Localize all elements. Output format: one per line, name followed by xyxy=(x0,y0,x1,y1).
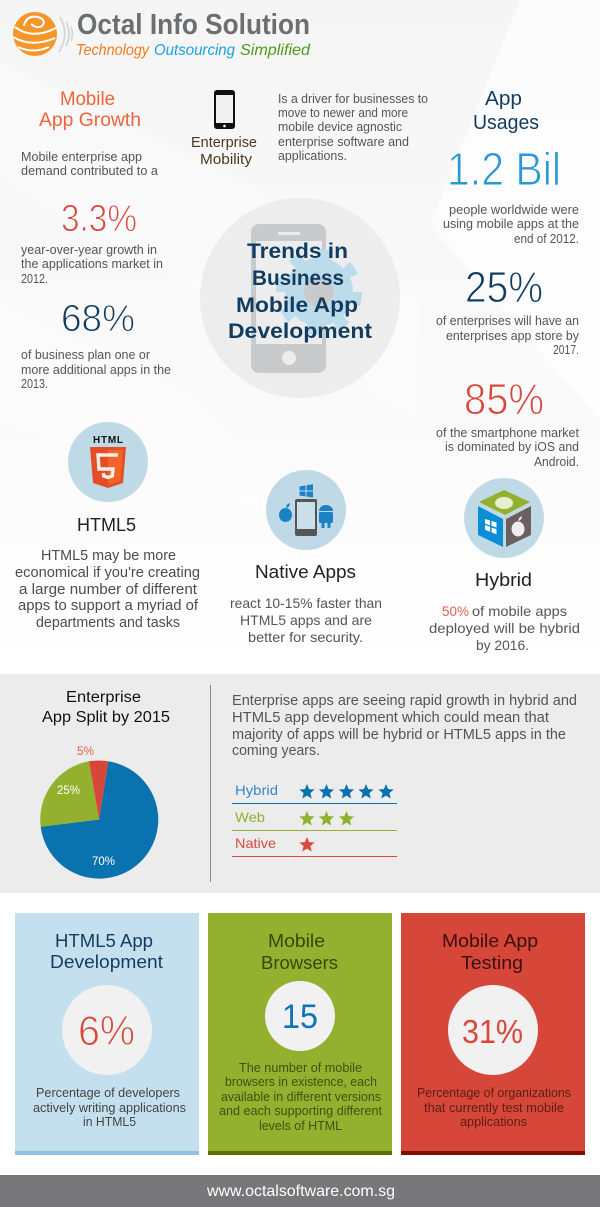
description: applications xyxy=(460,1114,527,1129)
description xyxy=(278,91,428,163)
growth text: the applications market in xyxy=(21,256,163,271)
heading: Browsers xyxy=(261,953,338,973)
panel: central title badge xyxy=(200,198,400,398)
heading: html5: HTML5 xyxy=(77,515,136,535)
intro text: Mobile enterprise app xyxy=(21,149,142,164)
description xyxy=(417,1085,571,1129)
title: Trends in xyxy=(247,240,348,263)
description: 50% xyxy=(442,603,469,619)
icon: phone and gear xyxy=(251,224,358,373)
description: The number of mobile xyxy=(239,1060,362,1075)
tagline xyxy=(76,42,311,59)
stat: 25%: 25% xyxy=(465,263,543,312)
description: mobile device agnostic xyxy=(278,119,402,134)
panel: mobile app growth xyxy=(21,89,171,391)
smartphone market text: Android. xyxy=(534,454,579,469)
description: departments and tasks xyxy=(36,614,180,631)
heading: Mobile xyxy=(268,931,325,951)
heading: enterprise mobility: Enterprise xyxy=(191,134,257,151)
legend: hybrid rating xyxy=(232,782,397,804)
legend: web rating xyxy=(232,809,397,831)
description: in HTML5 xyxy=(83,1114,136,1129)
intro text xyxy=(21,149,159,178)
description: Percentage of developers xyxy=(36,1085,180,1100)
heading: enterprise app split xyxy=(42,689,170,726)
people text: end of 2012. xyxy=(514,231,579,246)
footer: www.octalsoftware.com.sg xyxy=(206,1183,395,1200)
panel: mobile browsers card xyxy=(208,913,392,1155)
heading xyxy=(261,931,338,973)
icon: hybrid cube xyxy=(464,478,544,558)
people text xyxy=(443,202,579,246)
description xyxy=(15,547,200,631)
people text: people worldwide were xyxy=(449,202,579,217)
heading xyxy=(50,931,163,972)
panel: app usages xyxy=(436,88,579,469)
description: apps to support a myriad of xyxy=(18,597,199,614)
description: available in different versions xyxy=(221,1089,381,1104)
panel: hybrid xyxy=(429,478,580,653)
heading: Mobile App xyxy=(442,931,538,951)
heading: enterprise app split: App Split by 2015 xyxy=(42,709,170,726)
heading: native apps: Native Apps xyxy=(255,562,356,582)
tagline: Technology xyxy=(76,42,150,59)
legend: hybrid rating: Hybrid xyxy=(235,782,278,798)
description xyxy=(429,603,580,653)
panel: html5 xyxy=(15,422,200,631)
description: applications. xyxy=(278,148,347,163)
icon: html5 badge xyxy=(68,422,148,502)
panel: enterprise mobility xyxy=(191,90,428,168)
business plan text: of business plan one or xyxy=(21,347,151,362)
description: coming years. xyxy=(232,743,320,759)
description: better for security. xyxy=(248,629,363,645)
smartphone market text xyxy=(436,425,579,469)
description: economical if you're creating xyxy=(15,564,200,581)
heading xyxy=(442,931,538,973)
stat circle: 31% xyxy=(448,985,538,1075)
heading: Development xyxy=(50,952,163,972)
description: Is a driver for businesses to xyxy=(278,91,428,106)
description: react 10-15% faster than xyxy=(230,595,382,611)
growth text: year-over-year growth in xyxy=(21,242,157,257)
title xyxy=(228,240,372,343)
description: deployed will be hybrid xyxy=(429,620,580,636)
description: levels of HTML xyxy=(259,1118,342,1133)
stat: 68%: 68% xyxy=(61,298,135,340)
tagline: Outsourcing xyxy=(154,42,235,59)
logo xyxy=(13,9,311,59)
heading: hybrid: Hybrid xyxy=(475,570,532,590)
tagline: Simplified xyxy=(240,42,311,59)
badge circle xyxy=(200,198,400,398)
pie chart: 5% xyxy=(77,744,94,758)
enterprise store text: 2017. xyxy=(553,342,579,357)
panel: native apps xyxy=(230,470,382,645)
footer xyxy=(0,1175,600,1207)
title: Mobile App xyxy=(236,294,358,317)
legend: native rating: Native xyxy=(235,835,276,851)
legend: native rating xyxy=(232,835,397,857)
description: that currently test mobile xyxy=(424,1100,564,1115)
icon: native platforms xyxy=(266,470,346,550)
description xyxy=(219,1060,382,1133)
panel: html5 app development card xyxy=(15,913,199,1155)
description: browsers in existence, each xyxy=(225,1074,377,1089)
title: Business xyxy=(252,267,344,290)
business plan text xyxy=(21,347,171,391)
smartphone market text: is dominated by iOS and xyxy=(445,439,579,454)
pie chart: 70% xyxy=(92,854,115,868)
description xyxy=(230,595,382,645)
stat circle: 15: 15 xyxy=(282,998,318,1036)
heading: enterprise app split: Enterprise xyxy=(66,689,141,706)
enterprise store text: enterprises app store by xyxy=(446,328,579,343)
people text: using mobile apps at the xyxy=(443,216,579,231)
icon: html5 badge: HTML xyxy=(93,435,123,446)
heading: enterprise mobility: Mobility xyxy=(200,151,252,168)
stat circle: 31%: 31% xyxy=(462,1013,523,1050)
description: a large number of different xyxy=(19,581,198,598)
description: enterprise software and xyxy=(278,134,409,149)
description: HTML5 apps and are xyxy=(240,612,372,628)
growth text: 2012. xyxy=(21,271,48,286)
enterprise store text: of enterprises will have an xyxy=(436,313,579,328)
heading: mobile app growth: Mobile xyxy=(60,89,115,110)
pie chart: 25% xyxy=(57,783,80,797)
icon: smartphone xyxy=(214,90,235,129)
heading: HTML5 App xyxy=(55,931,153,951)
heading: app usages: Usages xyxy=(473,112,539,134)
description: and each supporting different xyxy=(219,1103,382,1118)
panel: enterprise app split xyxy=(0,674,600,893)
description: of mobile apps xyxy=(472,603,567,619)
business plan text: more additional apps in the xyxy=(21,362,171,377)
company name: Octal Info Solution xyxy=(77,9,310,41)
stat: 3.3%: 3.3% xyxy=(61,198,137,240)
heading: mobile app growth: App Growth xyxy=(39,110,141,131)
description xyxy=(33,1085,186,1129)
description: actively writing applications xyxy=(33,1100,186,1115)
enterprise store text xyxy=(436,313,579,357)
stat circle: 6% xyxy=(62,985,152,1075)
description xyxy=(232,693,577,759)
pie chart xyxy=(40,744,158,879)
description: Enterprise apps are seeing rapid growth in hybrid and xyxy=(232,693,577,709)
stat circle: 15 xyxy=(265,981,335,1051)
stat: 1.2 Bil: 1.2 Bil xyxy=(447,143,561,195)
description: HTML5 may be more xyxy=(41,547,176,564)
title: Development xyxy=(228,320,372,343)
legend: web rating: Web xyxy=(235,809,265,825)
heading: app usages xyxy=(473,88,539,134)
stat: 85%: 85% xyxy=(464,375,544,424)
stat circle: 6%: 6% xyxy=(78,1007,135,1054)
heading: app usages: App xyxy=(485,88,522,110)
description: majority of apps will be hybrid or HTML5 apps in the xyxy=(232,727,566,743)
heading: enterprise mobility xyxy=(191,134,257,168)
description: by 2016. xyxy=(476,637,529,653)
business plan text: 2013. xyxy=(21,376,48,391)
description: HTML5 app development which could mean that xyxy=(232,710,549,726)
description: move to newer and more xyxy=(278,105,408,120)
panel: mobile app testing card xyxy=(401,913,585,1155)
smartphone market text: of the smartphone market xyxy=(436,425,579,440)
description: Percentage of organizations xyxy=(417,1085,571,1100)
heading: Testing xyxy=(461,953,523,973)
growth text xyxy=(21,242,163,286)
icon: orange globe xyxy=(13,12,72,56)
heading: mobile app growth xyxy=(39,89,141,131)
intro text: demand contributed to a xyxy=(21,163,159,178)
